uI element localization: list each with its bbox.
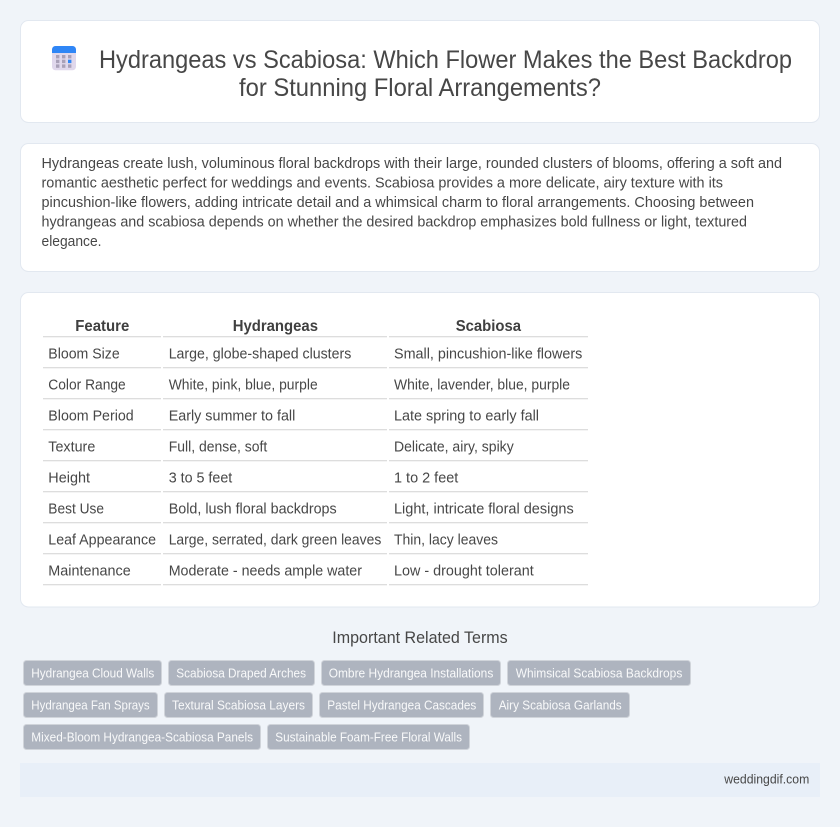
heading: related terms: Important Related Terms xyxy=(332,629,508,647)
row: color range: White, lavender, blue, purple xyxy=(394,377,570,393)
row: leaf appearance: Thin, lacy leaves xyxy=(394,532,498,548)
text block: intro paragraph: pincushion-like flowers, adding intricate detail and a whimsical charm to floral arrangements. Choosing between xyxy=(42,194,754,211)
row: bloom period: Bloom Period xyxy=(48,408,134,424)
tag: Pastel Hydrangea Cascades xyxy=(327,698,476,712)
row: texture xyxy=(48,439,514,455)
row: maintenance: Maintenance xyxy=(48,563,131,579)
row: bloom size: Large, globe-shaped clusters xyxy=(169,346,351,362)
tag: Airy Scabiosa Garlands xyxy=(499,698,622,712)
footer source text: weddingdif.com xyxy=(723,773,809,787)
table header: Hydrangeas xyxy=(233,318,318,335)
tag xyxy=(24,660,162,686)
row: height xyxy=(48,470,458,486)
row: best use: Light, intricate floral designs xyxy=(394,501,574,517)
row: leaf appearance: Leaf Appearance xyxy=(48,532,156,548)
title: Hydrangeas vs Scabiosa: Which Flower Makes the Best Backdrop xyxy=(99,46,792,74)
panel: header xyxy=(20,20,820,122)
row: best use: Bold, lush floral backdrops xyxy=(169,501,337,517)
tag xyxy=(168,660,314,686)
row: maintenance xyxy=(48,563,534,579)
tag xyxy=(322,660,500,686)
row: bloom period: Late spring to early fall xyxy=(394,408,539,424)
row: height: 1 to 2 feet xyxy=(394,470,458,486)
row: texture: Full, dense, soft xyxy=(169,439,267,455)
table rules xyxy=(43,336,588,585)
row: bloom period: Early summer to fall xyxy=(169,408,295,424)
panel: related term tags xyxy=(24,660,690,750)
text block: intro paragraph: romantic aesthetic perfect for weddings and events. Scabiosa provides a more delicate, airy texture with its xyxy=(42,174,723,192)
row: bloom size: Bloom Size xyxy=(48,346,120,362)
row: best use xyxy=(48,501,574,517)
row: color range: White, pink, blue, purple xyxy=(169,377,318,393)
tag: Sustainable Foam-Free Floral Walls xyxy=(275,730,462,744)
row: height: 3 to 5 feet xyxy=(169,470,232,486)
text block: intro paragraph: elegance. xyxy=(42,233,102,250)
tag xyxy=(320,692,484,718)
tag xyxy=(24,724,260,750)
tag xyxy=(508,660,690,686)
row: maintenance: Low - drought tolerant xyxy=(394,563,534,579)
row: height: Height xyxy=(48,470,90,486)
panel: intro xyxy=(20,144,820,272)
row: texture: Delicate, airy, spiky xyxy=(394,439,514,455)
panel: comparison table xyxy=(20,292,820,607)
tag xyxy=(164,692,312,718)
row: best use: Best Use xyxy=(48,501,104,517)
table header: Feature xyxy=(75,318,130,335)
row: bloom size: Small, pincushion-like flowers xyxy=(394,346,582,362)
tag: Whimsical Scabiosa Backdrops xyxy=(516,666,682,680)
text block: intro paragraph: hydrangeas and scabiosa depends on whether the desired backdrop emphasizes bold fullness or light, textured xyxy=(42,214,747,230)
title: for Stunning Floral Arrangements? xyxy=(239,74,601,102)
icon: calendar xyxy=(52,46,76,70)
tag xyxy=(490,692,630,718)
tag xyxy=(268,724,470,750)
row: leaf appearance xyxy=(48,532,498,548)
table header xyxy=(75,318,521,335)
row: bloom period xyxy=(48,408,539,424)
row: color range xyxy=(48,377,570,393)
tag: Hydrangea Cloud Walls xyxy=(31,666,154,680)
row: bloom size xyxy=(48,346,582,362)
tag xyxy=(24,692,158,718)
tag: Textural Scabiosa Layers xyxy=(172,698,305,712)
tag: Hydrangea Fan Sprays xyxy=(31,698,150,712)
row: maintenance: Moderate - needs ample water xyxy=(169,563,362,579)
text block: intro paragraph xyxy=(42,155,782,250)
tag: Mixed-Bloom Hydrangea-Scabiosa Panels xyxy=(31,730,253,744)
row: texture: Texture xyxy=(48,439,95,455)
table header: Scabiosa xyxy=(456,318,521,335)
tag: Ombre Hydrangea Installations xyxy=(329,666,493,680)
row: leaf appearance: Large, serrated, dark green leaves xyxy=(169,532,381,548)
tag: Scabiosa Draped Arches xyxy=(176,666,306,680)
row: color range: Color Range xyxy=(48,377,126,393)
text block: intro paragraph: Hydrangeas create lush, voluminous floral backdrops with their large, rounded clusters of blooms, offering a soft and xyxy=(42,155,782,172)
title xyxy=(99,46,792,102)
footer xyxy=(20,763,820,797)
